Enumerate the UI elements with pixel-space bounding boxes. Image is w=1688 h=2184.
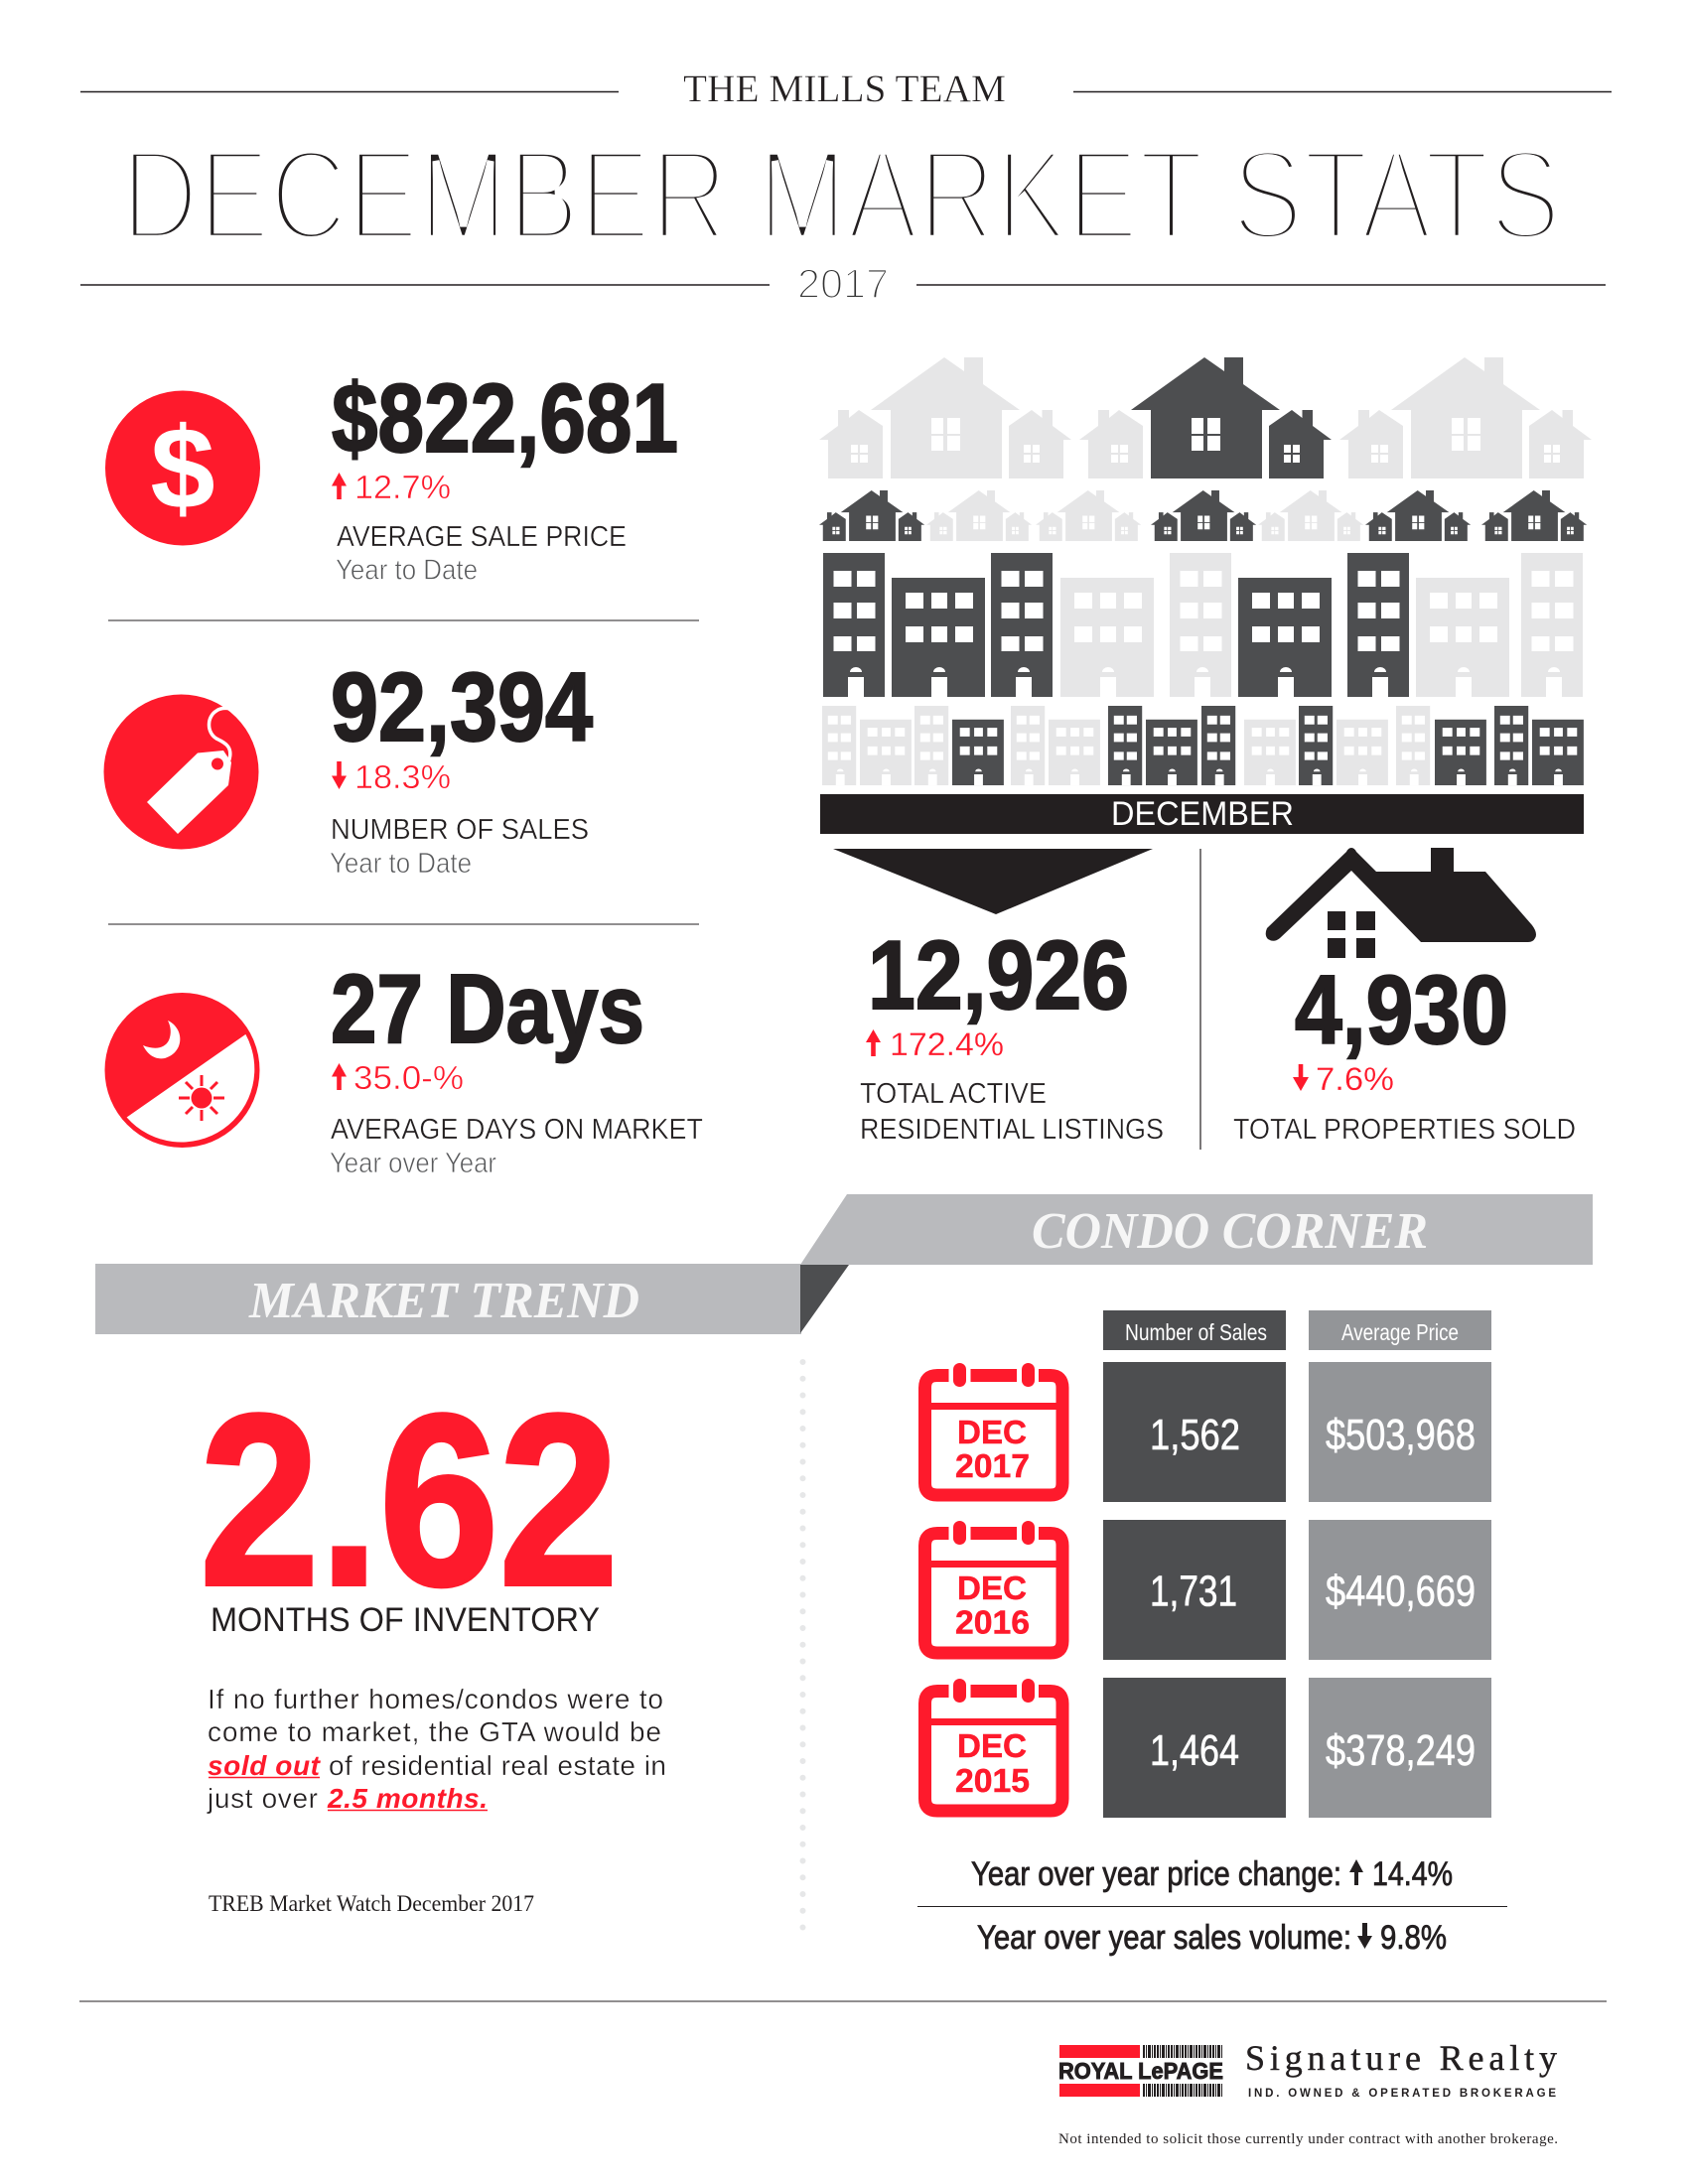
arrow up bbox=[332, 1063, 347, 1090]
icon: calendar: 2016 bbox=[955, 1604, 1030, 1640]
price change note: 14.4% bbox=[1372, 1855, 1453, 1893]
text block: If no further homes/condos were to bbox=[208, 1684, 663, 1714]
icon: calendar: 2017 bbox=[955, 1447, 1030, 1484]
source: TREB Market Watch December 2017 bbox=[209, 1891, 534, 1916]
column header: number of sales bbox=[1103, 1310, 1286, 1350]
sales volume note: Year over year sales volume: bbox=[977, 1919, 1351, 1957]
header bbox=[80, 68, 1612, 307]
icon: calendar: DEC bbox=[957, 1414, 1027, 1450]
row: dec 2017: $503,968 bbox=[1326, 1411, 1476, 1459]
panel: market trend: MONTHS OF INVENTORY bbox=[211, 1601, 600, 1639]
stat: total active listings: TOTAL ACTIVE bbox=[860, 1078, 1047, 1110]
stat: total properties sold: 4,930 bbox=[1295, 955, 1508, 1064]
row: dec 2015: $378,249 bbox=[1326, 1726, 1476, 1775]
row: dec 2016: 1,731 bbox=[1150, 1567, 1237, 1616]
stat: number of sales: 18.3% bbox=[354, 758, 451, 795]
stat: total active listings: RESIDENTIAL LISTINGS bbox=[860, 1114, 1164, 1146]
stat: days on market: 27 Days bbox=[331, 954, 644, 1063]
stat: total properties sold: TOTAL PROPERTIES SOLD bbox=[1233, 1114, 1576, 1146]
dotted divider bbox=[800, 1362, 806, 1931]
icon: calendar bbox=[925, 1521, 1062, 1653]
sales volume note: 9.8% bbox=[1380, 1919, 1447, 1957]
stat: total active listings bbox=[833, 849, 1164, 1146]
disclaimer: Not intended to solicit those currently under contract with another brokerage. bbox=[1058, 2131, 1558, 2147]
stat: average sale price: 12.7% bbox=[354, 469, 451, 505]
heading: year: 2017 bbox=[797, 260, 889, 307]
icon: calendar bbox=[925, 1679, 1062, 1811]
stat: days on market: AVERAGE DAYS ON MARKET bbox=[331, 1114, 703, 1146]
logo: signature realty: Signature Realty bbox=[1245, 2038, 1557, 2078]
houses row large bbox=[819, 357, 1592, 478]
stat: number of sales: 92,394 bbox=[331, 652, 593, 761]
icon: price tag bbox=[103, 695, 258, 850]
column header: number of sales: Number of Sales bbox=[1125, 1319, 1267, 1345]
stat: days on market: 35.0-% bbox=[353, 1059, 464, 1096]
stat: total properties sold bbox=[1233, 848, 1576, 1146]
stat: days on market: Year over Year bbox=[330, 1148, 496, 1179]
arrow down bbox=[332, 761, 347, 789]
stat: average sale price: $822,681 bbox=[332, 363, 678, 473]
stat: number of sales: Year to Date bbox=[330, 848, 472, 880]
stat: total active listings: 12,926 bbox=[868, 920, 1129, 1029]
banner: market trend bbox=[95, 1264, 849, 1334]
icon: calendar bbox=[925, 1363, 1062, 1495]
row: dec 2015 bbox=[925, 1678, 1491, 1818]
houses row small bbox=[819, 490, 1587, 541]
icon: dollar coin: $ bbox=[150, 403, 215, 533]
text block: come to market, the GTA would be bbox=[208, 1716, 661, 1747]
arrow down bbox=[1293, 1064, 1309, 1091]
december bar bbox=[820, 794, 1584, 834]
stat: number of sales: NUMBER OF SALES bbox=[331, 814, 589, 846]
december bar: DECEMBER bbox=[1111, 795, 1294, 833]
text block: 2.5 months. bbox=[327, 1783, 488, 1814]
icon: calendar: DEC bbox=[957, 1570, 1027, 1606]
stat: total active listings: 172.4% bbox=[890, 1026, 1004, 1062]
banner: market trend: MARKET TREND bbox=[248, 1273, 639, 1329]
price change note: Year over year price change: bbox=[971, 1855, 1341, 1893]
stat: number of sales bbox=[103, 652, 593, 880]
footer logos: IND. OWNED & OPERATED BROKERAGE bbox=[1248, 2088, 1556, 2100]
text block: of residential real estate in bbox=[329, 1750, 666, 1781]
icon: calendar: 2015 bbox=[955, 1762, 1030, 1799]
column header: average price bbox=[1309, 1310, 1491, 1350]
icon: calendar: DEC bbox=[957, 1727, 1027, 1764]
logo: royal lepage: ROYAL LePAGE bbox=[1058, 2058, 1223, 2084]
text block: just over bbox=[207, 1783, 318, 1814]
banner: condo corner bbox=[800, 1194, 1593, 1265]
panel: condo table bbox=[917, 1310, 1507, 1957]
icon: house roof bbox=[1266, 848, 1536, 958]
row: dec 2015: 1,464 bbox=[1150, 1726, 1239, 1775]
icon: dollar coin bbox=[105, 391, 260, 546]
text block bbox=[207, 1684, 666, 1814]
column header: average price: Average Price bbox=[1341, 1319, 1459, 1345]
stat: total properties sold: 7.6% bbox=[1316, 1061, 1394, 1097]
banner: condo corner: CONDO CORNER bbox=[1032, 1203, 1428, 1260]
buildings row small bbox=[822, 706, 1584, 785]
stat: average sale price: AVERAGE SALE PRICE bbox=[337, 521, 627, 553]
stat: days on market bbox=[105, 954, 703, 1179]
icon: down triangle bbox=[833, 849, 1153, 914]
text block: sold out bbox=[208, 1750, 322, 1781]
row: dec 2016 bbox=[925, 1520, 1491, 1660]
panel: market trend bbox=[200, 1364, 666, 1916]
arrow up bbox=[332, 473, 347, 499]
big number: 2.62 bbox=[200, 1364, 619, 1637]
row: dec 2017: 1,562 bbox=[1150, 1411, 1240, 1459]
arrow up bbox=[866, 1029, 881, 1056]
stat: average sale price: Year to Date bbox=[336, 554, 478, 586]
stat: average sale price bbox=[105, 363, 678, 586]
footer logos bbox=[1058, 2038, 1558, 2147]
row: dec 2017 bbox=[925, 1362, 1491, 1502]
logo: royal lepage bbox=[1058, 2045, 1223, 2097]
buildings row large bbox=[823, 553, 1583, 697]
icon: day and night bbox=[105, 993, 260, 1148]
heading: team name: THE MILLS TEAM bbox=[683, 68, 1006, 110]
row: dec 2016: $440,669 bbox=[1326, 1567, 1476, 1616]
